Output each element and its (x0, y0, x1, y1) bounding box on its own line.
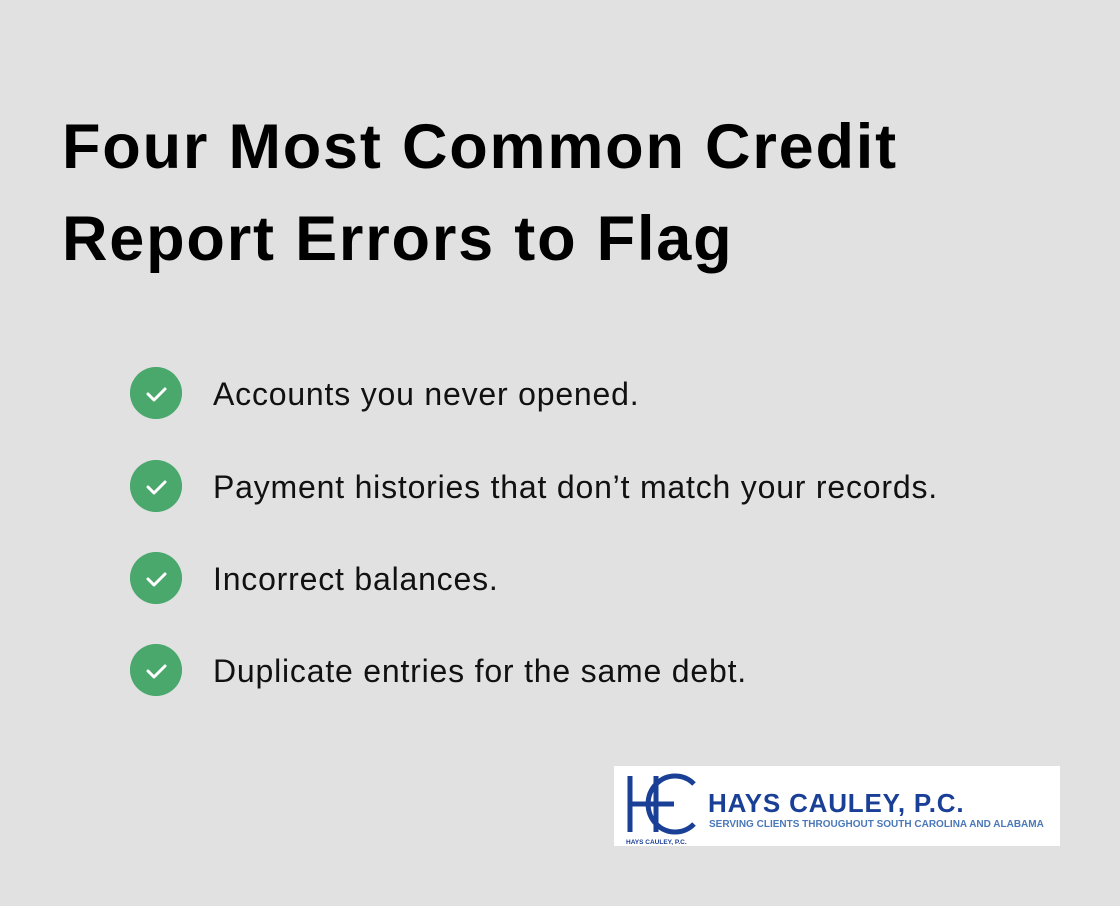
list item 1: Accounts you never opened. (213, 376, 639, 412)
icon: check (130, 367, 182, 419)
title: Report Errors to Flag (62, 204, 733, 274)
logo mark (630, 776, 694, 832)
icon: check (130, 552, 182, 604)
list item 2 (130, 460, 938, 512)
title: Four Most Common Credit (62, 112, 898, 182)
logo (614, 766, 1060, 846)
list item 4: Duplicate entries for the same debt. (213, 653, 747, 689)
list item 4 (130, 644, 747, 696)
list item 1 (130, 367, 639, 419)
logo: HAYS CAULEY, P.C. (626, 839, 687, 846)
list item 3 (130, 552, 499, 604)
list item 2: Payment histories that don’t match your records. (213, 469, 938, 505)
logo: SERVING CLIENTS THROUGHOUT SOUTH CAROLINA AND ALABAMA (709, 819, 1044, 830)
icon: check (130, 644, 182, 696)
logo name: HAYS CAULEY, P.C. (708, 788, 964, 818)
list item 3: Incorrect balances. (213, 561, 499, 597)
title (62, 112, 898, 274)
icon: check (130, 460, 182, 512)
